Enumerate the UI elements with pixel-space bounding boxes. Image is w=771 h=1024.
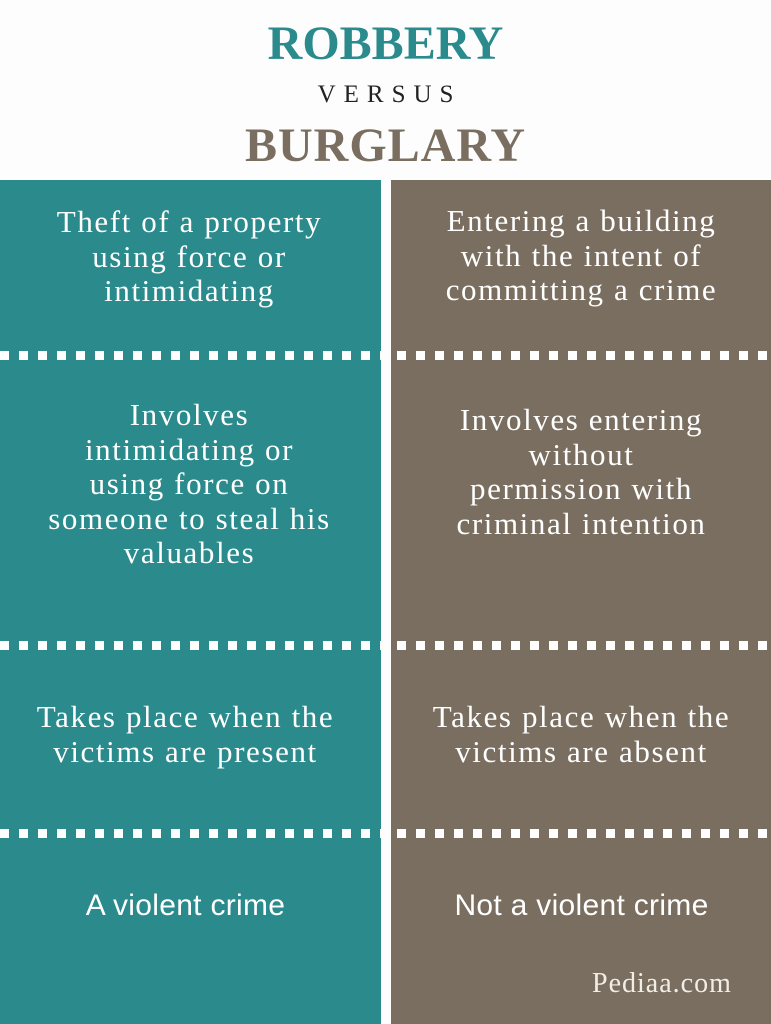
title: burglary: BURGLARY <box>245 119 526 172</box>
text: robbery involves: valuables <box>124 535 255 570</box>
text: robbery victims <box>37 699 334 768</box>
text: burglary violence: Not a violent crime <box>454 889 709 922</box>
text: robbery victims: Takes place when the <box>37 699 334 734</box>
text: robbery violence: A violent crime <box>86 889 285 922</box>
text: burglary definition: with the intent of <box>461 238 702 272</box>
text: robbery victims: victims are present <box>53 734 318 768</box>
text: burglary victims: victims are absent <box>455 734 708 768</box>
text: robbery involves: using force on <box>90 466 289 501</box>
logo: pediaa.com: Pediaa.com <box>592 968 732 999</box>
text: burglary definition: committing a crime <box>446 272 717 307</box>
text: burglary involves: criminal intention <box>456 506 707 540</box>
panel: burglary column <box>391 180 771 1024</box>
text: robbery definition: using force or <box>92 238 287 274</box>
text: burglary involves: without <box>529 436 634 472</box>
text: robbery involves <box>48 397 331 570</box>
title: robbery: ROBBERY <box>268 17 503 70</box>
text: burglary involves: Involves entering <box>460 402 703 437</box>
text: robbery involves: intimidating or <box>85 432 294 466</box>
text: burglary involves <box>456 402 707 540</box>
text: robbery involves: Involves <box>130 397 249 432</box>
subtitle: versus: VERSUS <box>318 81 461 108</box>
text: robbery definition: intimidating <box>104 273 275 308</box>
text: robbery definition <box>57 204 322 308</box>
text: robbery definition: Theft of a property <box>57 204 322 239</box>
text: robbery involves: someone to steal his <box>48 500 331 536</box>
text: burglary definition <box>446 203 717 307</box>
text: burglary definition: Entering a building <box>447 203 716 238</box>
text: burglary victims <box>433 699 730 768</box>
panel: robbery column <box>0 180 381 1024</box>
text: burglary involves: permission with <box>470 471 693 506</box>
text: burglary victims: Takes place when the <box>433 699 730 734</box>
